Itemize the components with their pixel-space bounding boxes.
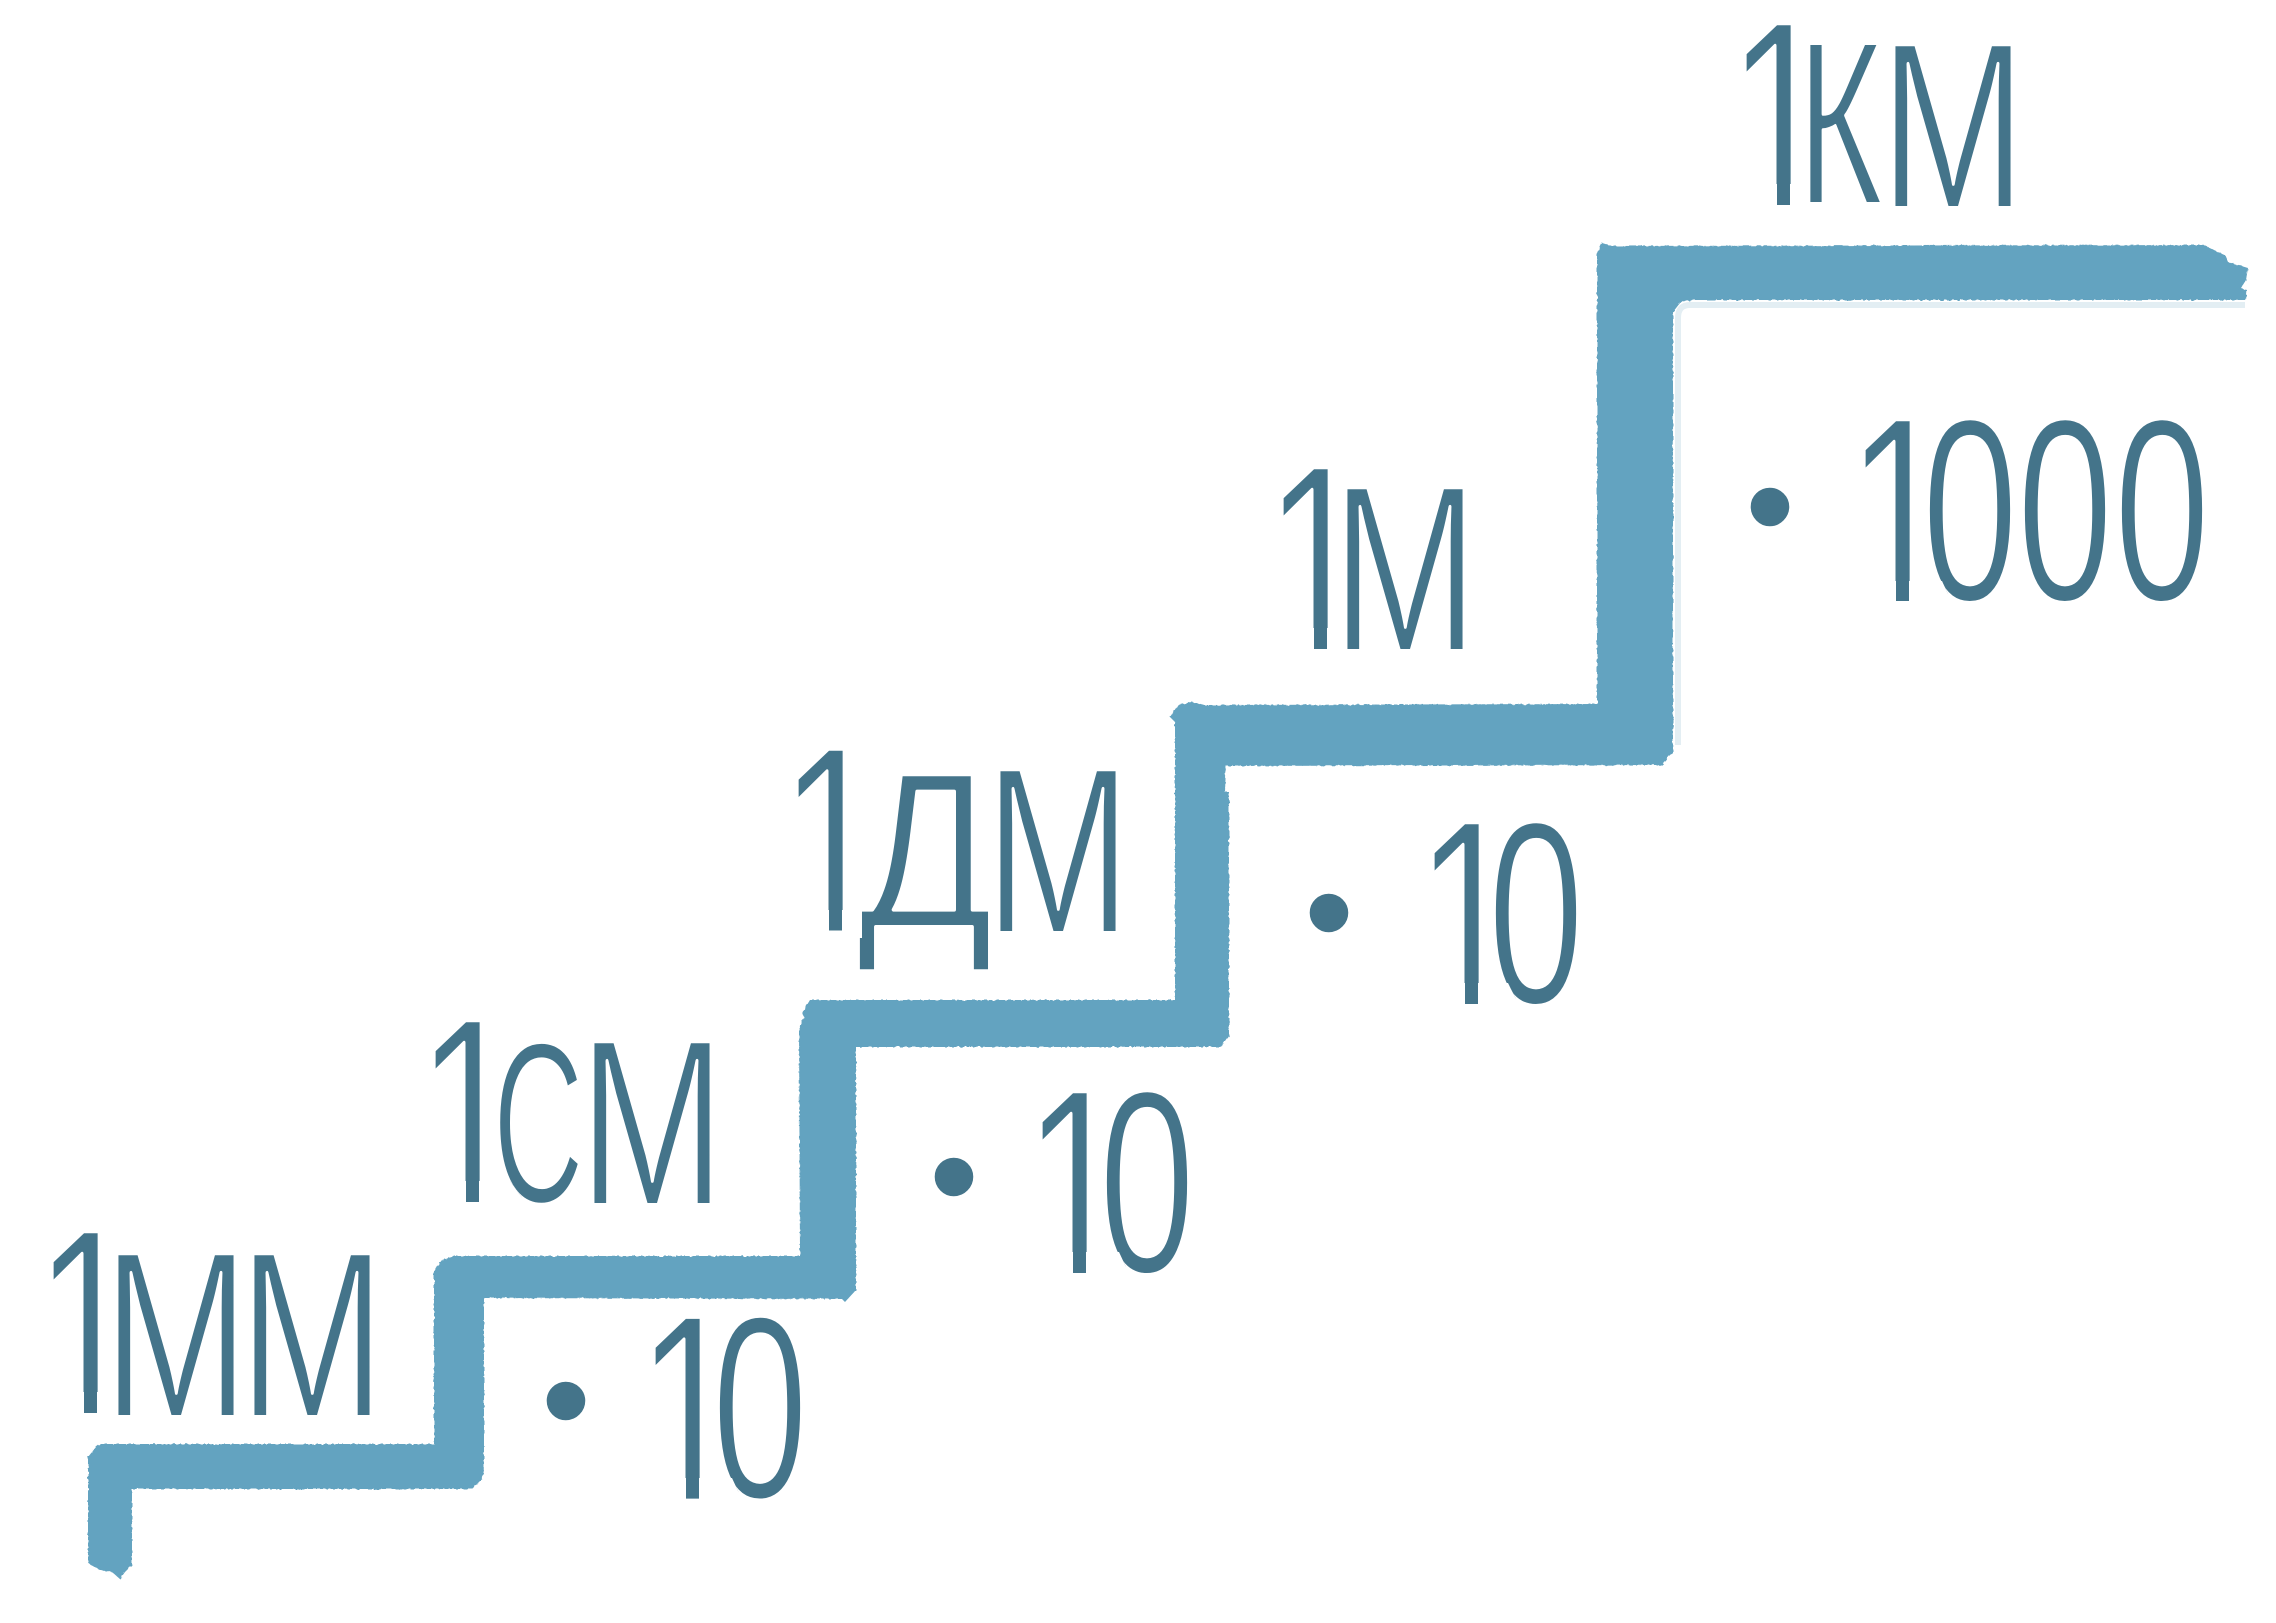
multiplier: times 1000, top step: 0 [2017,366,2113,656]
multiplier: times 10, second step: 0 [1099,1038,1195,1328]
multiplier: times 10, third step: • [1302,824,1356,999]
label: 1 mm: М [238,1203,386,1468]
label: 1 cm: М [578,991,726,1256]
multiplier: times 10, second step: 1 [1023,1033,1130,1332]
label: 1 dm: Д [857,727,994,975]
multiplier: times 1000, top step: • [1742,418,1797,593]
label: 1 dm: 1 [779,690,886,990]
multiplier: times 1000, top step: 0 [2114,366,2210,656]
label: 1 cm: С [493,994,584,1252]
multiplier: times 10, first step: 0 [712,1263,808,1554]
multiplier: times 1000, top step: 0 [1922,366,2018,656]
multiplier: times 1000, top step: 1 [1846,361,1953,660]
label: 1 dm: М [984,719,1132,984]
label: 1 m: М [1332,437,1478,702]
label: 1 km: М [1880,0,2026,259]
multiplier: times 10, third step: 1 [1415,764,1522,1063]
label: 1 cm: 1 [416,962,523,1261]
multiplier: times 10, first step: 1 [636,1259,743,1558]
multiplier: times 10, third step: 0 [1488,768,1584,1060]
multiplier: times 10, second step: • [926,1088,981,1263]
label: 1 mm: 1 [34,1173,141,1472]
multiplier: times 10, first step: • [538,1312,593,1487]
staircase [88,243,2248,1579]
label: 1 m: 1 [1264,409,1371,708]
label: 1 mm: М [102,1203,250,1468]
